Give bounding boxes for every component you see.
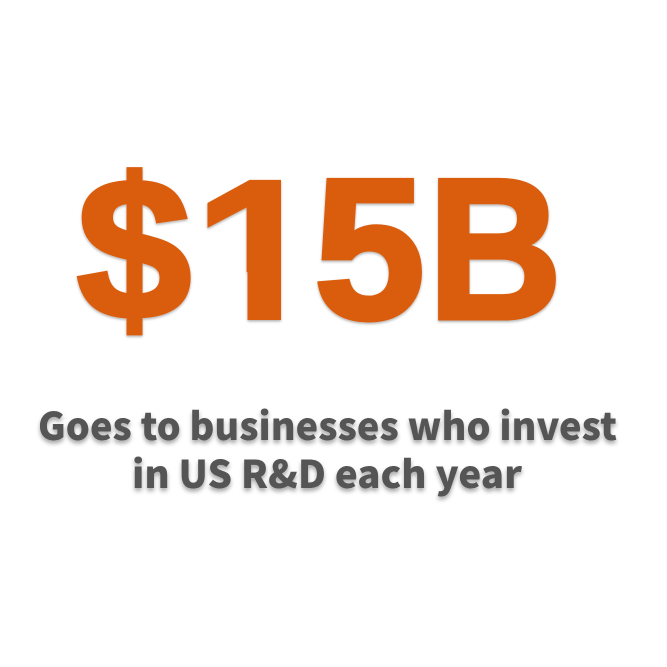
caption text bbox=[38, 396, 617, 499]
caption text: in US R&D each year bbox=[132, 444, 522, 499]
title: $15B: 5 bbox=[314, 138, 425, 361]
caption text: Goes to businesses who invest bbox=[38, 396, 617, 451]
infographic canvas bbox=[38, 167, 618, 502]
title: $15B: 1 bbox=[193, 139, 325, 362]
title: $15B bbox=[76, 167, 558, 338]
title: $15B: $ bbox=[77, 138, 191, 361]
title: $15B: B bbox=[428, 138, 562, 361]
